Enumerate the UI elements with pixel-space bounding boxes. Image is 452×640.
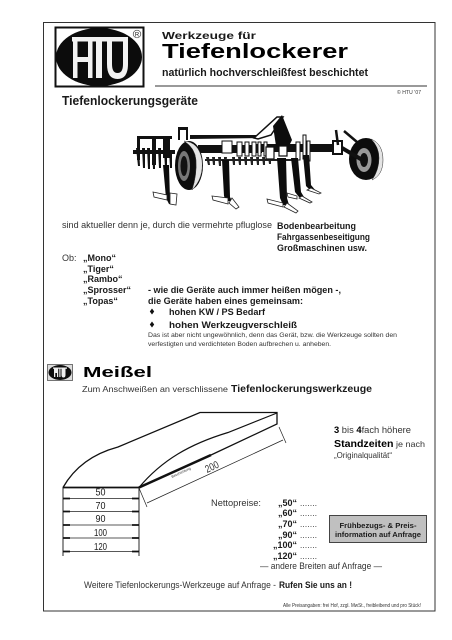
price footnote: Alle Preisangaben: frei Hof, zzgl. MwSt., freibleibend und pro Stück! <box>283 603 421 609</box>
width labels: 50 <box>96 486 106 498</box>
header title block <box>162 31 368 79</box>
common traits text: - wie die Geräte auch immer heißen mögen -, <box>148 285 341 295</box>
front axle and wheel <box>333 130 383 180</box>
early-order callout box: Frühbezugs- & Preis- <box>340 521 417 530</box>
copyright: © HTU '07 <box>397 89 421 96</box>
HTU logo: R <box>135 32 140 38</box>
frame beams <box>137 127 335 165</box>
shanks <box>163 155 316 205</box>
net prices list: ....... <box>300 509 317 518</box>
hitch tower <box>254 115 292 159</box>
width labels: 90 <box>96 513 106 525</box>
intro text block <box>62 220 370 253</box>
net prices list: „120“ <box>273 551 297 561</box>
subheading: Tiefenlockerungswerkzeuge <box>231 384 372 395</box>
intro text block: Bodenbearbeitung <box>277 221 356 231</box>
width labels <box>94 486 107 553</box>
call to action: Weitere Tiefenlockerungs-Werkzeuge auf Anfrage - <box>84 580 276 590</box>
list of machine names: „Tiger“ <box>83 264 114 274</box>
left wheel <box>175 141 203 190</box>
common traits text <box>148 285 397 348</box>
HTU logo <box>56 28 144 86</box>
net prices list: ....... <box>300 499 317 508</box>
net prices list: ....... <box>300 520 317 529</box>
durability callout: Standzeiten je nach <box>334 439 425 450</box>
net prices list: „50“ <box>278 498 297 508</box>
call to action: Rufen Sie uns an ! <box>279 580 352 590</box>
common traits text: Das ist aber nicht ungewöhnlich, denn das Gerät, bzw. die Werkzeuge sollten den <box>148 332 397 339</box>
net prices list: „60“ <box>278 508 297 518</box>
heading: Tiefenlockerungsgeräte: Tiefenlockerungsgeräte <box>62 93 198 108</box>
common traits text: hohen Werkzeugverschleiß <box>169 320 298 330</box>
illustration: Tiefenlockerer machine <box>133 115 383 213</box>
net prices list <box>211 498 382 571</box>
intro text block: Fahrgassenbeseitigung <box>277 232 370 242</box>
common traits text: hohen KW / PS Bedarf <box>169 307 266 317</box>
list of machine names: „Rambo“ <box>83 274 123 284</box>
list of machine names: „Sprosser“ <box>83 285 131 295</box>
early-order callout box <box>330 516 426 542</box>
early-order callout box: information auf Anfrage <box>335 530 421 539</box>
heading: Meißel: Meißel <box>83 364 152 381</box>
net prices list: „70“ <box>278 519 297 529</box>
common traits text: verfestigten und verdichteten Boden aufbrechen u. anheben. <box>148 341 331 348</box>
net prices list: ....... <box>300 531 317 540</box>
length label: 200 <box>203 459 221 476</box>
list of machine names: „Topas“ <box>83 296 118 306</box>
width labels: 70 <box>96 500 106 512</box>
net prices list: „90“ <box>278 530 297 540</box>
subheading <box>82 384 372 395</box>
header title block: natürlich hochverschleißfest beschichtet <box>162 67 368 79</box>
chisel technical drawing <box>63 412 286 556</box>
header rule <box>155 86 427 87</box>
intro text block: sind aktueller denn je, durch die vermehrte pfluglose <box>62 220 272 230</box>
durability callout: 3 bis 4fach höhere <box>334 425 411 435</box>
coating label: Beschichtung <box>171 466 192 479</box>
subheading: Zum Anschweißen an verschlissene <box>82 384 228 394</box>
net prices list: — andere Breiten auf Anfrage — <box>260 561 382 571</box>
net prices list: ....... <box>300 541 317 550</box>
list of machine names: „Mono“ <box>83 253 116 263</box>
header title block: Werkzeuge für <box>162 31 256 42</box>
common traits text: die Geräte haben eines gemeinsam: <box>148 296 303 306</box>
net prices list: Nettopreise: <box>211 498 261 508</box>
list of machine names: Ob: <box>62 253 77 263</box>
list of machine names <box>62 253 131 306</box>
rear roller <box>133 148 175 169</box>
feet <box>153 188 321 213</box>
small HTU logo <box>48 364 72 380</box>
intro text block: Großmaschinen usw. <box>277 243 367 253</box>
durability callout <box>334 425 425 460</box>
width labels: 100 <box>94 527 107 539</box>
net prices list: ....... <box>300 552 317 561</box>
clamps <box>222 135 310 161</box>
width labels: 120 <box>94 541 107 553</box>
net prices list: „100“ <box>273 540 297 550</box>
durability callout: „Originalqualität“ <box>334 451 392 460</box>
header title block: Tiefenlockerer <box>162 41 348 63</box>
teeth row <box>205 157 295 166</box>
page frame <box>44 22 435 611</box>
